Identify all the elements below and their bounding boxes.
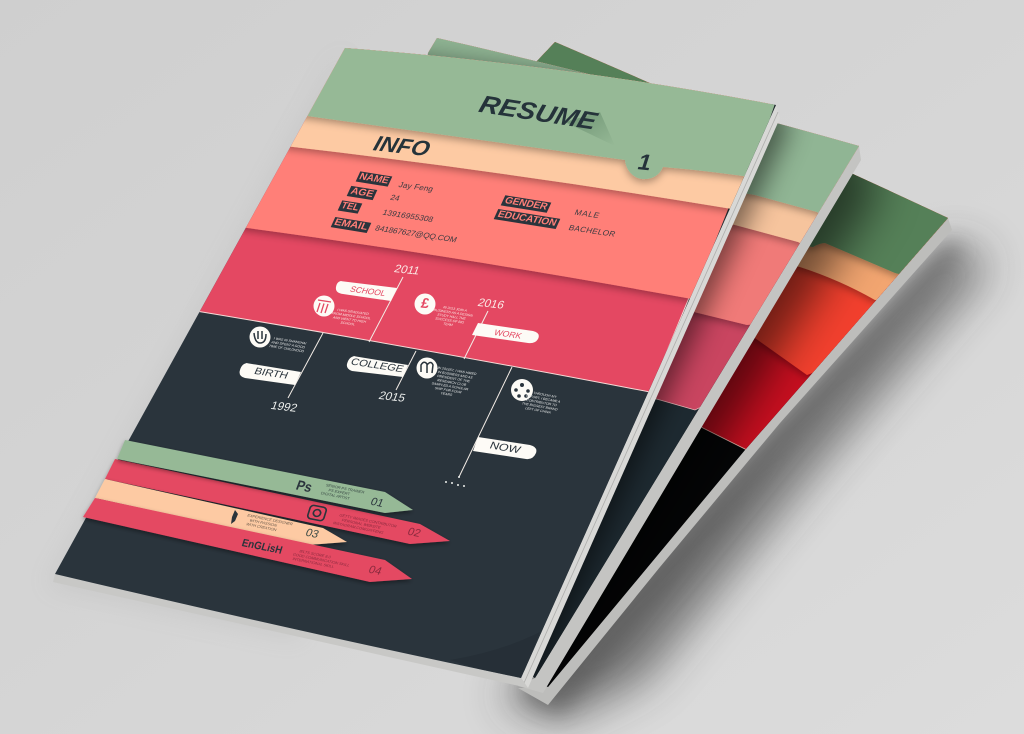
icon: school column	[314, 296, 334, 316]
title shadow	[565, 112, 615, 146]
skill text 01: PS EXPERT	[328, 488, 351, 496]
skill text 03: WITH CREATION	[245, 522, 277, 532]
text: work description: YEARS	[440, 391, 454, 397]
ribbon 04 crimson	[83, 498, 412, 582]
value: email: 841867627@QQ.COM	[374, 224, 459, 244]
pill: college	[347, 356, 408, 377]
skill text 01: SENIOR PS TRAINER	[325, 483, 365, 495]
year: 2011: 2011	[392, 263, 422, 277]
pill: work	[472, 323, 539, 343]
book 1 page edge bottom	[53, 574, 528, 688]
text: college description: BUSINESS AS A DESIGN	[433, 308, 474, 318]
text: college description: STUDY HALL THE	[436, 313, 467, 321]
skill text 04: GOOD COMMUNICATION SKILL	[292, 553, 351, 568]
number 03: 03	[304, 527, 320, 541]
text: work description: IN BUSINESS AND AS	[437, 370, 474, 380]
text: present description: THE BIGGEST BRAND	[521, 402, 559, 412]
value: gender: MALE	[573, 208, 601, 220]
skill text 02: GETTY IMAGES CONTRIBUTOR	[339, 513, 398, 529]
text: college description: TEAM	[442, 322, 454, 327]
panel: personal info	[331, 171, 617, 244]
skill text 04: IELTS SCORE 8.0	[299, 549, 331, 559]
band: green with number tab	[304, 48, 776, 186]
text: work description	[426, 366, 478, 399]
number 02: 02	[406, 526, 422, 540]
text: work description: PRESIDENT OF THE	[436, 374, 471, 383]
pill: college: COLLEGE	[349, 357, 405, 375]
book 2 (middle)	[428, 38, 861, 688]
text: college description: SUCCESS OF BIG	[434, 317, 465, 325]
text: school description: FROM MIDDLE SCHOOL	[331, 311, 372, 320]
skill: Ps: Ps	[294, 478, 314, 496]
tag: education: EDUCATION	[496, 209, 558, 229]
text: school description: AND WENT TO HIGH	[332, 316, 367, 324]
heading: INFO: INFO	[371, 131, 433, 161]
book 3 cover bands	[536, 42, 948, 687]
book 3 (back)	[518, 42, 952, 705]
ribbon 01 green	[117, 440, 413, 513]
book 2 page edge	[518, 146, 861, 693]
skill text 03: EXPERIENCE DESIGNER	[247, 514, 294, 526]
year: 1992: 1992	[269, 399, 299, 415]
tag: email: EMAIL	[332, 217, 370, 233]
title: RESUME: RESUME	[476, 91, 602, 135]
icon: college pound	[414, 294, 436, 314]
pill: school	[336, 281, 397, 301]
icon: birth glyph	[250, 326, 270, 348]
page curl	[478, 667, 526, 678]
pill: birth	[240, 363, 301, 385]
skill text 02	[332, 513, 398, 537]
book 2 cover bands	[428, 38, 859, 678]
skill text 04: INTERNATIONAL SKILL	[292, 557, 336, 569]
text: work description: RESEARCH CLUB	[436, 378, 468, 387]
icon: instagram	[307, 505, 327, 521]
pill: now: NOW	[488, 440, 522, 456]
year: 2016: 2016	[476, 296, 506, 312]
text: present description: THROUGH MY	[533, 391, 558, 399]
text: present description: CONTRIBUTOR TO	[525, 398, 558, 407]
pill: birth: BIRTH	[252, 367, 290, 381]
icon: college pound: £	[420, 296, 431, 312]
panel: skills ribbons	[83, 440, 450, 582]
band: salmon	[242, 48, 770, 306]
skill text 02: PERSONAL WEBSITE	[341, 518, 382, 530]
tag: gender: GENDER	[503, 196, 550, 212]
text: present description: LEFT OF CHINA	[524, 406, 552, 415]
skill: English: EnGLisH	[240, 537, 284, 557]
skill text 04	[290, 549, 353, 572]
ribbon 02 crimson	[105, 459, 450, 544]
value: education: BACHELOR	[567, 223, 617, 239]
text: school description: SCHOOL	[340, 321, 356, 326]
text: birth description: I WAS IN SHANGHAI	[273, 337, 307, 345]
year: 2015: 2015	[377, 389, 407, 405]
tag: tel: TEL	[339, 201, 361, 213]
text: work description: IN 2016ST, I WAS HIRED	[437, 366, 478, 376]
text: school description: I WAS GRADUATED	[336, 308, 370, 316]
panel: timeline	[240, 263, 564, 487]
skill text 01: DIGITAL ARTIST	[320, 491, 351, 501]
text: work description: SHIP FOR FOUR	[434, 386, 463, 394]
band: crimson	[200, 48, 770, 392]
value: telephone: 13916955308	[381, 208, 435, 224]
value: age: 24	[389, 193, 402, 203]
text: birth description: AND SPENT A GOOD	[271, 340, 306, 349]
pill: now	[473, 437, 536, 459]
skill text 02: INSTAGRAM.COM/JAYFENG	[332, 521, 384, 535]
book 3 page edge	[518, 218, 952, 705]
ribbon 03 peach	[95, 479, 347, 545]
skill text 01	[320, 483, 365, 503]
band: peach	[287, 48, 772, 216]
book 1 page edge right	[521, 105, 780, 688]
book 1 (front)	[40, 30, 800, 690]
book 1 cover bands	[40, 30, 800, 690]
pill: school: SCHOOL	[349, 284, 388, 298]
icon: pen nib	[231, 510, 238, 524]
number 04: 04	[367, 564, 383, 578]
text: school description	[327, 307, 373, 328]
tag: name: NAME	[357, 172, 391, 186]
icon: present dots	[511, 379, 533, 401]
text: college description: IN 2013 JOIN A	[442, 305, 468, 313]
tag: age: AGE	[349, 186, 376, 200]
text: work description: SAMPLED A SCHOLAR	[431, 382, 469, 391]
pill: work: WORK	[493, 328, 524, 341]
text: college description	[428, 304, 476, 329]
timeline end dots	[445, 476, 465, 487]
number tab: 1: 1	[635, 149, 655, 175]
text: birth description	[268, 336, 309, 353]
number 01: 01	[369, 496, 385, 510]
skill text 03: WITH PASSION	[249, 519, 278, 528]
text: birth description: TIME OF CHILDHOOD	[268, 344, 305, 353]
line: school	[288, 277, 512, 477]
text: present description: EFFORT, I BECAME A	[525, 394, 562, 404]
skill text 03	[243, 514, 294, 535]
value: name: Jay Feng	[397, 181, 435, 193]
icon: work clip	[416, 358, 438, 378]
text: present description	[519, 390, 564, 416]
